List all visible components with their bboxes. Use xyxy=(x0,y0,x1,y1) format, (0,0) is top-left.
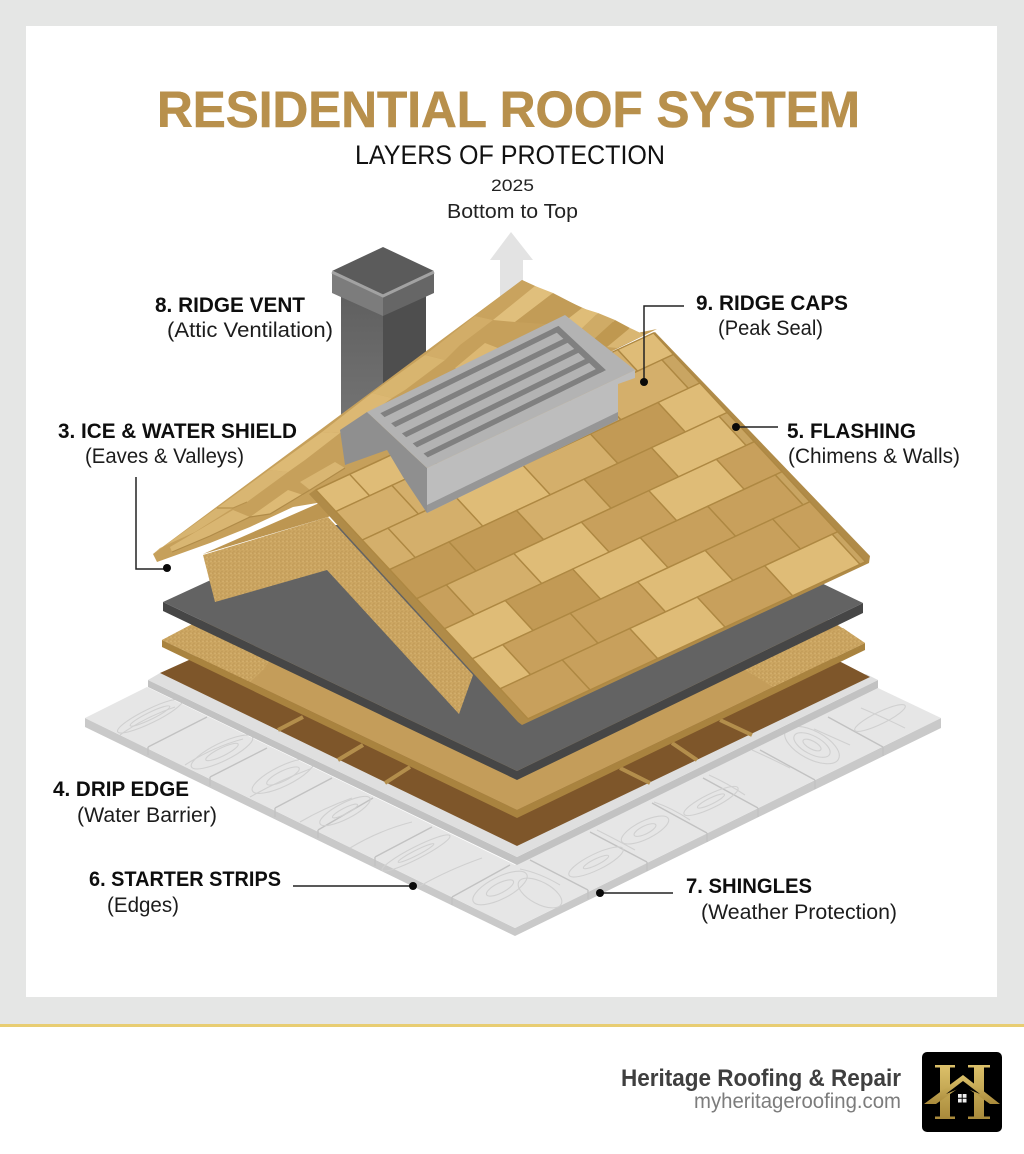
layer: wood deck planks xyxy=(85,687,941,936)
callout: starter strips xyxy=(89,868,417,917)
year: 2025 xyxy=(491,176,534,195)
arrow: bottom to top xyxy=(490,232,533,300)
chimney xyxy=(332,247,434,430)
callout: ice and water shield: 3. ICE & WATER SHIELD xyxy=(58,420,297,443)
callout: ridge caps: (Peak Seal) xyxy=(718,317,823,340)
company name: Heritage Roofing & Repair xyxy=(621,1065,901,1092)
roof edge thickness xyxy=(309,332,870,725)
subtitle: LAYERS OF PROTECTION xyxy=(355,140,665,170)
callout: drip edge xyxy=(53,778,217,827)
back roof slope with stepped shingles xyxy=(153,280,657,562)
sand ice and water shield layer xyxy=(203,490,473,714)
callout: flashing: (Chimens & Walls) xyxy=(788,445,960,468)
shingle grid xyxy=(316,333,866,719)
front roof slope xyxy=(309,332,870,725)
callout: ridge vent xyxy=(155,294,333,342)
website: myheritageroofing.com xyxy=(694,1090,901,1113)
callout: shingles xyxy=(596,875,897,924)
logo xyxy=(922,1052,1002,1132)
callout: ridge vent: 8. RIDGE VENT xyxy=(155,294,305,317)
callout: ridge caps: 9. RIDGE CAPS xyxy=(696,292,848,315)
callout: flashing xyxy=(732,420,960,468)
callout: shingles: 7. SHINGLES xyxy=(686,875,812,898)
peak tiles xyxy=(475,280,535,320)
layer: tan underlayment xyxy=(162,620,865,818)
callout: shingles: (Weather Protection) xyxy=(701,901,897,924)
layer: grey drip edge frame xyxy=(148,673,878,865)
callout: ice and water shield: (Eaves & Valleys) xyxy=(85,445,244,468)
callout: ice and water shield xyxy=(58,420,297,572)
layer: dark grey membrane xyxy=(163,525,863,780)
callout: ridge vent: (Attic Ventilation) xyxy=(167,319,333,342)
layer: brown decking with rafters xyxy=(160,610,870,846)
direction note: Bottom to Top xyxy=(447,201,578,223)
callout: drip edge: (Water Barrier) xyxy=(77,804,217,827)
ridge vent xyxy=(340,315,635,513)
title: RESIDENTIAL ROOF SYSTEM xyxy=(157,81,860,138)
white panel xyxy=(26,26,997,997)
callout: starter strips: (Edges) xyxy=(107,894,179,917)
callout: flashing: 5. FLASHING xyxy=(787,420,916,443)
footer xyxy=(0,1024,1024,1154)
callout: ridge caps xyxy=(640,292,848,386)
callout: starter strips: 6. STARTER STRIPS xyxy=(89,868,281,891)
callout: drip edge: 4. DRIP EDGE xyxy=(53,778,189,801)
